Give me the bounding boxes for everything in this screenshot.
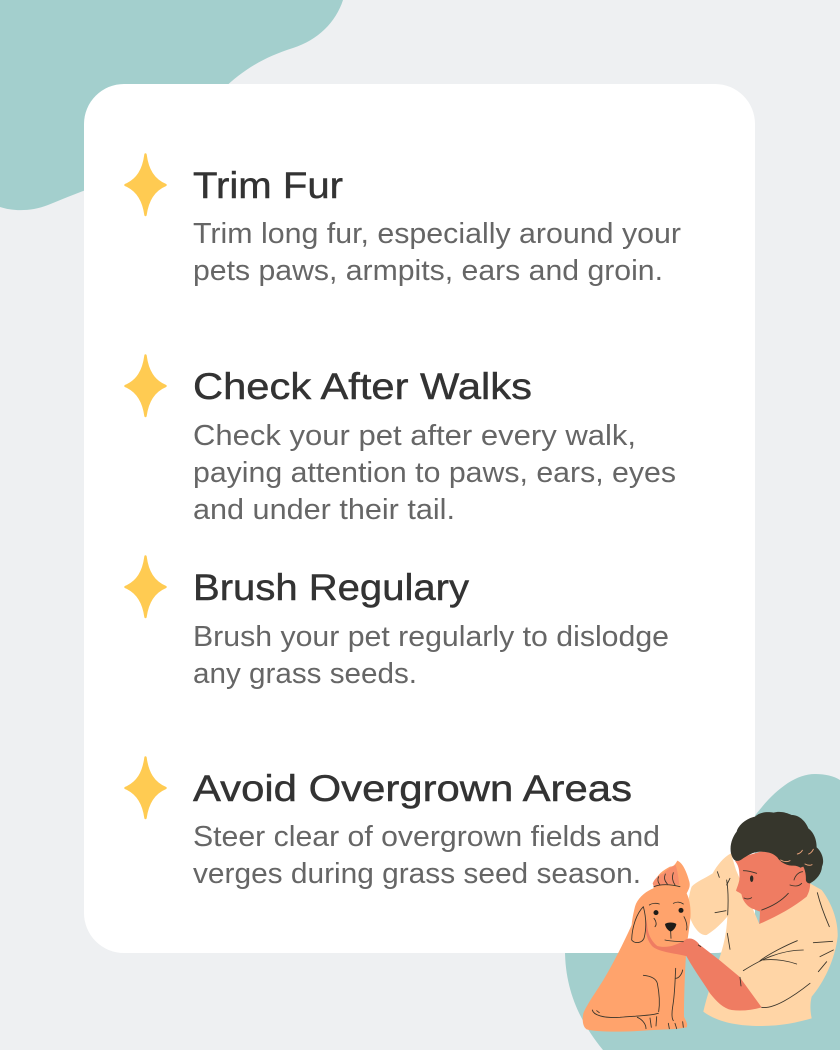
text: trim fur description bbox=[193, 218, 682, 287]
text: trim fur description: Trim long fur, especially around your bbox=[193, 218, 682, 250]
heading: avoid overgrown areas: Avoid Overgrown Areas bbox=[193, 768, 632, 809]
teal blob: bottom right bbox=[565, 774, 840, 1050]
person: shirt line details bbox=[698, 872, 833, 1008]
illustration: person checking dog bbox=[583, 812, 838, 1032]
text: avoid overgrown description: verges during grass seed season. bbox=[193, 858, 641, 890]
icon: sparkle bbox=[126, 556, 166, 617]
text: avoid overgrown description bbox=[193, 821, 660, 890]
text: check after walks description: and under their tail. bbox=[193, 494, 455, 526]
person: ear bbox=[790, 867, 806, 887]
icon: sparkle bbox=[126, 758, 166, 818]
tip: check after walks bbox=[126, 356, 676, 526]
heading: trim fur: Trim Fur bbox=[193, 165, 343, 206]
panel: white tips card bbox=[84, 84, 755, 953]
person: hand bbox=[646, 918, 701, 957]
tip: avoid overgrown areas bbox=[126, 758, 660, 890]
text: avoid overgrown description: Steer clear of overgrown fields and bbox=[193, 821, 660, 853]
icon: sparkle bbox=[126, 356, 166, 416]
text: brush description bbox=[193, 621, 669, 690]
person: arm bbox=[684, 945, 762, 1011]
dog: line details bbox=[592, 873, 687, 1029]
tip: brush regularly bbox=[126, 556, 669, 690]
person: eye bbox=[750, 875, 753, 882]
icon: sparkle bbox=[126, 154, 166, 215]
person: face and neck bbox=[735, 850, 810, 924]
text: check after walks description bbox=[193, 420, 676, 526]
person: sleeve overlap bbox=[740, 947, 813, 1009]
heading: brush regulary: Brush Regulary bbox=[193, 567, 470, 608]
teal blob: top left bbox=[0, 0, 343, 210]
text: check after walks description: Check your pet after every walk, bbox=[193, 420, 636, 452]
person: fingers on dog ear bbox=[653, 865, 679, 887]
heading: check after walks: Check After Walks bbox=[193, 366, 532, 407]
dog: eyes and nose bbox=[653, 908, 683, 932]
person: shirt bbox=[688, 853, 838, 1026]
text: brush description: any grass seeds. bbox=[193, 658, 417, 690]
dog: body and head bbox=[583, 861, 691, 1032]
person: hair bbox=[731, 812, 823, 883]
tip: trim fur bbox=[126, 154, 682, 287]
text: check after walks description: paying attention to paws, ears, eyes bbox=[193, 457, 676, 489]
text: brush description: Brush your pet regularly to dislodge bbox=[193, 621, 669, 653]
person: hair highlights bbox=[781, 849, 813, 865]
text: trim fur description: pets paws, armpits, ears and groin. bbox=[193, 255, 663, 287]
person: facial lines bbox=[743, 871, 803, 910]
